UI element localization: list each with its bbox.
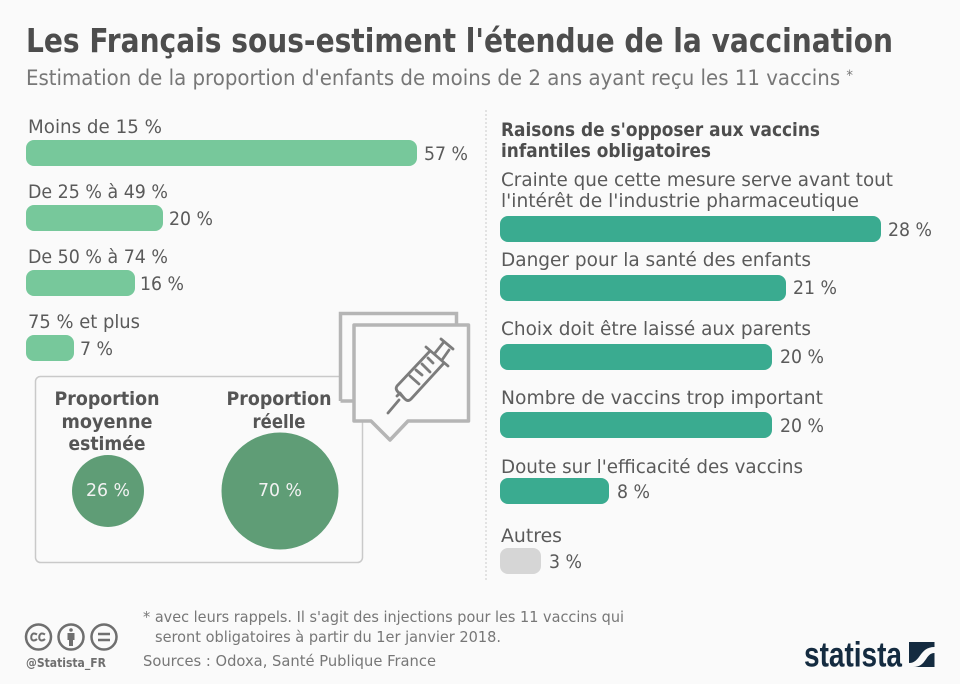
heading: real proportion: Proportion xyxy=(226,388,332,410)
subtitle: * xyxy=(846,68,853,84)
panel: reasons to oppose xyxy=(500,119,932,574)
bar row: De 25 % à 49 %: 20 % xyxy=(169,208,213,230)
bar row: Choix xyxy=(500,318,824,370)
bar row: 75 % et plus: 75 % et plus xyxy=(28,311,140,333)
heading: estimated proportion: moyenne xyxy=(62,411,152,433)
icon: syringe speech bubbles xyxy=(340,314,468,440)
bar row: Nombre: 20 % xyxy=(780,415,824,437)
bar row: Autres xyxy=(500,525,582,574)
bar row: Doute: Doute sur l'efficacité des vaccins xyxy=(501,456,803,478)
bar row: De 25 % à 49 % xyxy=(26,181,213,231)
circle: 70 % xyxy=(222,432,338,550)
bar row: Autres: Autres xyxy=(501,525,562,547)
bar row: Moins de 15 %: 57 % xyxy=(424,143,468,165)
icon: creative commons licences xyxy=(26,624,116,650)
panel: proportion comparison xyxy=(36,376,362,562)
logo: statista: statista xyxy=(804,636,902,674)
bar row: Doute: 8 % xyxy=(617,481,650,503)
bar row: Danger: 21 % xyxy=(793,277,837,299)
footnote: seront obligatoires à partir du 1er janvier 2018. xyxy=(155,628,501,646)
heading: estimated proportion: Proportion xyxy=(54,388,160,410)
bar row: Crainte: 28 % xyxy=(888,219,932,241)
bar row: Doute xyxy=(500,456,803,504)
bar row: 75 % et plus: 7 % xyxy=(80,338,113,360)
panel: estimated proportion bars xyxy=(26,116,468,361)
bar row: De 50 % à 74 %: De 50 % à 74 % xyxy=(28,246,168,268)
bar row: Crainte: l'intérêt de l'industrie pharmaceutique xyxy=(501,190,859,212)
divider xyxy=(485,110,487,582)
bar row: Moins de 15 % xyxy=(26,116,468,166)
circle: 26 % xyxy=(72,455,144,527)
bar row: Choix: 20 % xyxy=(780,346,824,368)
heading: real proportion: réelle xyxy=(252,411,306,433)
heading: reasons: infantiles obligatoires xyxy=(501,140,711,162)
bar row: Autres: 3 % xyxy=(549,551,582,573)
footnote: * avec leurs rappels. Il s'agit des injections pour les 11 vaccins qui xyxy=(143,608,624,626)
bar row: Crainte: Crainte que cette mesure serve avant tout xyxy=(501,169,893,191)
bar row: Choix: Choix doit être laissé aux parents xyxy=(501,318,811,340)
circle: 26 %: 26 % xyxy=(86,480,130,501)
circle: 70 %: 70 % xyxy=(258,480,302,501)
handle: @Statista_FR xyxy=(26,655,106,671)
subtitle: Estimation de la proportion d'enfants de moins de 2 ans ayant reçu les 11 vaccins xyxy=(26,66,891,90)
bar row: 75 % et plus xyxy=(26,311,140,361)
heading: estimated proportion: estimée xyxy=(68,433,146,455)
sources: Sources : Odoxa, Santé Publique France xyxy=(143,652,436,670)
bar row: Nombre: Nombre de vaccins trop important xyxy=(501,387,823,409)
bar row: Danger: Danger pour la santé des enfants xyxy=(501,249,811,271)
bar row: De 50 % à 74 % xyxy=(26,246,184,296)
heading: reasons: Raisons de s'opposer aux vaccins xyxy=(501,119,820,141)
bar row: De 25 % à 49 %: De 25 % à 49 % xyxy=(28,181,168,203)
bar row: Nombre xyxy=(500,387,824,438)
bar row: Danger xyxy=(500,249,837,301)
bar row: Crainte xyxy=(500,169,932,242)
bar row: De 50 % à 74 %: 16 % xyxy=(140,273,184,295)
bar row: Moins de 15 %: Moins de 15 % xyxy=(28,116,162,138)
